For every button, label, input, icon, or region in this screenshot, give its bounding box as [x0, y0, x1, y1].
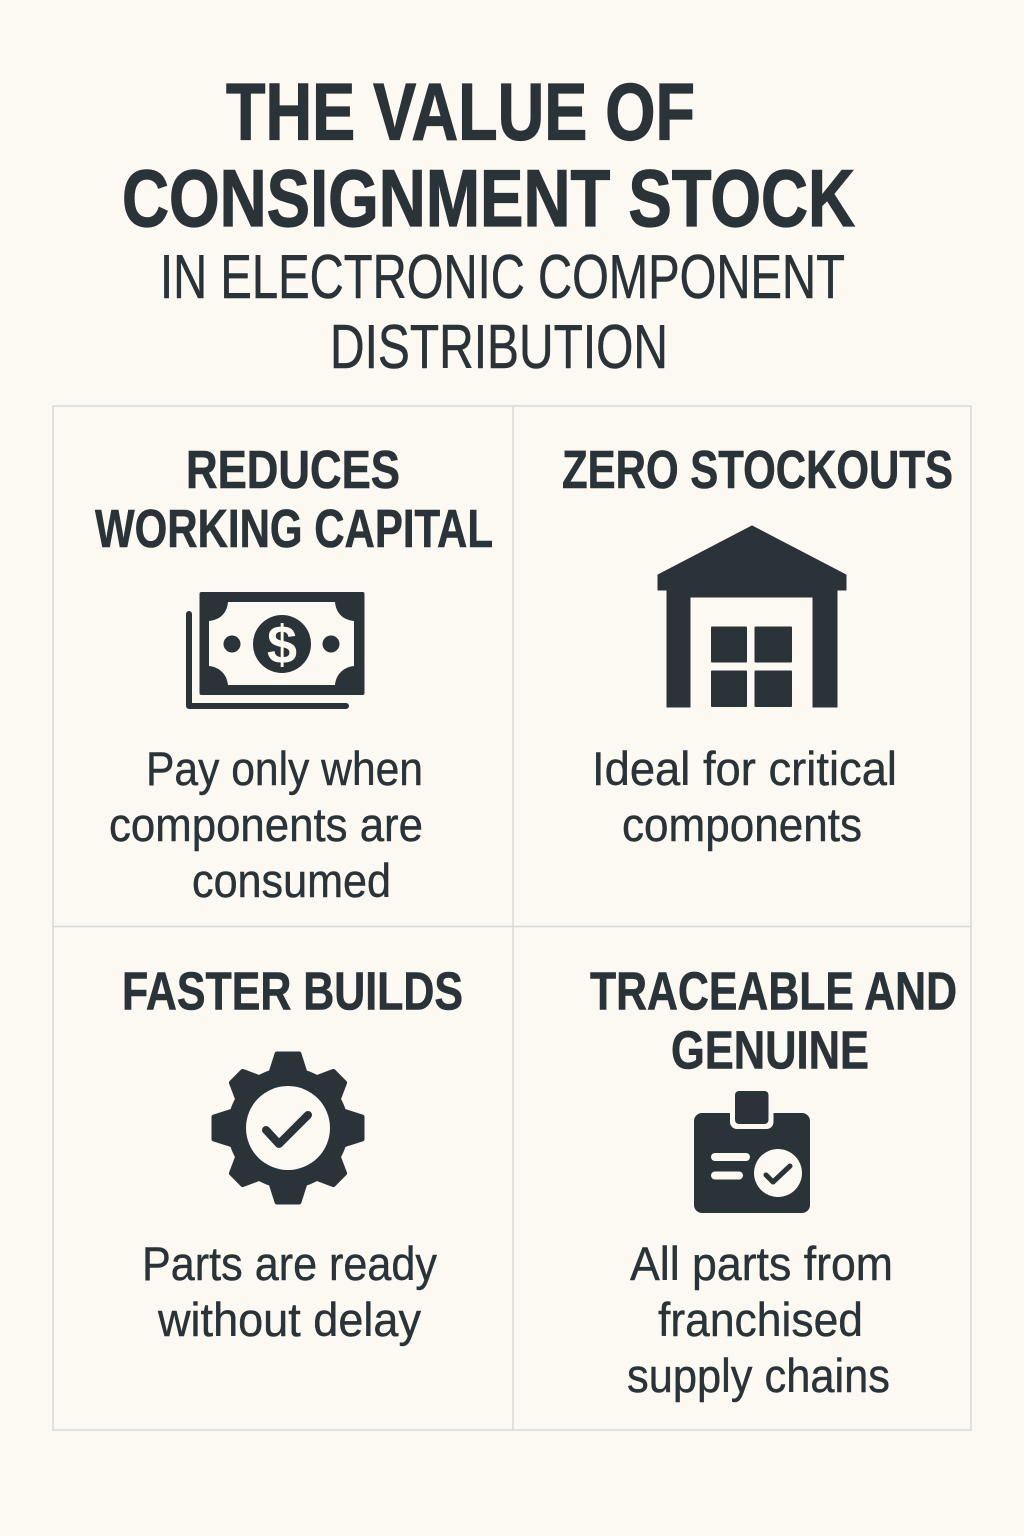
- description: franchised supply chains: [627, 1237, 893, 1402]
- icon: banknote: [189, 592, 364, 706]
- description: ideal for critical components: Ideal for critical: [592, 742, 897, 795]
- description: franchised supply chains: All parts from: [630, 1237, 893, 1290]
- description: parts ready without delay: Parts are ready: [142, 1237, 437, 1290]
- description: pay only when consumed: Pay only when: [146, 742, 423, 795]
- panel: faster builds: [122, 962, 463, 1346]
- panel: traceable and genuine: [590, 962, 957, 1402]
- icon: banknote: $: [267, 615, 297, 675]
- heading: traceable and genuine: GENUINE: [671, 1020, 869, 1080]
- icon: verified badge: [694, 1091, 810, 1213]
- panel: zero stockouts: [562, 440, 953, 851]
- panel: reduces working capital: [95, 440, 493, 907]
- description: parts ready without delay: without delay: [157, 1293, 421, 1346]
- description: pay only when consumed: [109, 742, 423, 907]
- description: pay only when consumed: consumed: [192, 854, 391, 907]
- title: THE VALUE OF: [226, 68, 695, 158]
- title: CONSIGNMENT STOCK: [122, 154, 855, 244]
- title: [122, 68, 855, 382]
- title: DISTRIBUTION: [330, 313, 668, 382]
- description: ideal for critical components: components: [622, 798, 862, 851]
- description: franchised supply chains: franchised: [658, 1293, 863, 1346]
- heading: traceable and genuine: [590, 962, 957, 1080]
- description: pay only when consumed: components are: [109, 798, 423, 851]
- heading: reduces working capital: WORKING CAPITAL: [95, 499, 493, 559]
- icon: gear with check: [214, 1054, 362, 1202]
- heading: reduces working capital: [95, 440, 493, 559]
- description: franchised supply chains: supply chains: [627, 1349, 890, 1402]
- heading: reduces working capital: REDUCES: [186, 440, 400, 500]
- icon: warehouse: [658, 526, 846, 707]
- heading: faster builds: FASTER BUILDS: [122, 962, 463, 1022]
- description: ideal for critical components: [592, 742, 897, 851]
- description: parts ready without delay: [142, 1237, 437, 1346]
